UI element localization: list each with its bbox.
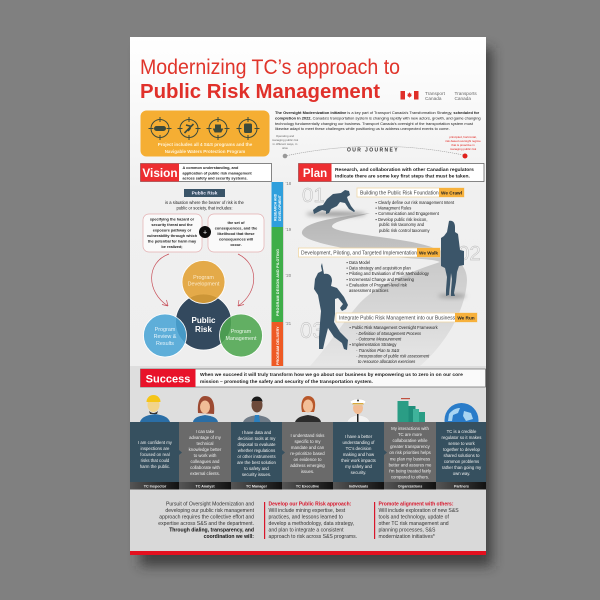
- footer left text: expertise across S&S and the department.: [158, 521, 254, 527]
- band behind avatars: [130, 366, 486, 422]
- icon: partners globe: [444, 403, 478, 422]
- Government of Canada logo: Transports: [454, 91, 477, 96]
- step 2 bullets: ▪ Piloting and Evaluation of Risk Methodology: [346, 271, 430, 276]
- step 2 bullets: ▪ Data strategy and acquisition plan: [346, 266, 411, 270]
- column: TC Executive: I understand risks: [291, 433, 324, 438]
- icon: train target: [236, 117, 260, 140]
- footer middle text: approach to risk across S&S programs.: [268, 534, 357, 540]
- column: Partners: rather than going my: [442, 465, 482, 470]
- column: TC Manager: whether regulations: [238, 448, 275, 453]
- column: Individuals: understanding of: [342, 440, 375, 445]
- step 1 bullets: ▪ Clearly define our risk management Intent: [376, 200, 455, 205]
- column: TC Inspector: risks that could: [141, 458, 170, 463]
- column: Individuals: I have a better: [345, 434, 373, 439]
- circle: program development: Development: [188, 282, 220, 288]
- avatar: inspector: [140, 395, 170, 422]
- column: TC Manager: are the best solution: [237, 460, 276, 465]
- column: Organizations: me plan my business: [390, 456, 430, 462]
- title: Public Risk Management: [140, 81, 380, 103]
- public risk label: Public: [191, 316, 216, 325]
- footer middle text: Develop our Public Risk approach:: [268, 502, 352, 508]
- audience columns: [130, 422, 486, 482]
- column: Organizations: greater transparency: [390, 444, 431, 449]
- footer left text: coordination we will:: [204, 534, 254, 540]
- public risk definition: public or society, that includes:: [176, 206, 233, 210]
- icon: car target: [148, 117, 172, 140]
- step 2 bullets: assessment practices: [349, 288, 388, 293]
- footer left text: Through dialing, transparency, and: [169, 528, 254, 534]
- column: Individuals: my safety and: [345, 464, 372, 469]
- column: TC Analyst: to work with: [194, 453, 217, 458]
- callout: consequences: occur.: [230, 243, 242, 247]
- column: Partners: regulator so it makes: [442, 435, 481, 440]
- icon: plane target: [178, 117, 200, 140]
- timeline: ’21: [286, 321, 292, 326]
- icon: plus: [199, 226, 211, 238]
- footer middle text: develop a methodology, data strategy,: [268, 521, 354, 527]
- our journey arc: managing public risk: [272, 138, 299, 142]
- audience labels: [130, 482, 486, 490]
- our journey arc: in different ways, in: [273, 142, 298, 146]
- step 3 bullets: [350, 325, 439, 364]
- column: TC Analyst: advantage of my: [189, 435, 222, 440]
- panel: success heading: [140, 369, 486, 387]
- intro paragraph: [275, 110, 481, 131]
- audience labels: TC Manager: [246, 484, 268, 488]
- panel: success heading: When we succeed it will truly transform how we go about our business by empowering us to zero in on our core: [200, 372, 463, 378]
- circle: program review: Program: [155, 327, 176, 333]
- footer right text: planning processes, S&S: [378, 528, 436, 534]
- step 3 bullets: - Outcome Measurement: [356, 336, 402, 342]
- callout: hazard: exposure pathway or: [153, 228, 192, 232]
- callout: hazard: be realized;: [161, 245, 183, 249]
- project scope caption: Navigable Waters Protection Program: [165, 149, 245, 154]
- circle: program management: Management: [226, 336, 257, 342]
- our journey arc: OUR JOURNEY: [347, 148, 399, 154]
- circle: program management: [220, 314, 262, 357]
- Government of Canada logo: Transport: [425, 91, 446, 96]
- footer left text: Pursuit of Oversight Modernization and: [166, 502, 254, 508]
- panel: vision heading: application of public risk management: [182, 171, 252, 175]
- circle: program review: Results: [156, 341, 174, 347]
- panel: project scope: [140, 110, 270, 156]
- title: Modernizing TC’s approach to: [140, 55, 400, 79]
- circle: program development: Program: [193, 275, 214, 281]
- audience labels: Organizations: [398, 484, 422, 488]
- footer left text: approach requires the collective effort and: [159, 514, 254, 520]
- title: [140, 55, 400, 103]
- footer right text: [374, 502, 459, 540]
- circle: program management: Program: [231, 329, 252, 335]
- our journey arc: silos: [282, 146, 288, 150]
- column: Partners: shared solutions to: [443, 453, 480, 458]
- column: Individuals: security.: [351, 470, 366, 475]
- column: TC Analyst: external clients.: [190, 471, 220, 476]
- step 2 heading: We Walk: [419, 250, 438, 255]
- callout: consequences: consequences will: [219, 238, 253, 242]
- step 3 bullets: ▪ Public Risk Management Oversight Framework: [350, 325, 439, 330]
- column: TC Executive: re-prioritize based: [290, 451, 325, 456]
- column: Organizations: better and assures me: [389, 462, 432, 468]
- column: TC Executive: issues.: [301, 469, 314, 474]
- our journey arc: that is proactive in: [451, 143, 475, 147]
- avatar: analyst: [193, 396, 218, 422]
- step 1 heading: Building the Public Risk Foundation: [360, 190, 439, 196]
- project scope caption: Project includes all 4 S&S programs and the: [158, 142, 253, 147]
- step 1 bullets: ▪ Managment Rules: [376, 206, 411, 210]
- panel: success heading: Success: [146, 374, 190, 386]
- footer middle text: Will include mining expertise, best: [268, 508, 346, 514]
- column: Organizations: [384, 422, 436, 482]
- footer middle text: practices, and lessons learned to: [268, 514, 343, 520]
- timeline: PROGRAM DESIGN AND PILOTING: [276, 249, 280, 316]
- icon: organizations buildings: [398, 398, 425, 422]
- step 3 bullets: - Incorporation of public risk assessment: [356, 354, 430, 358]
- panel: plan heading: Plan: [303, 168, 327, 180]
- avatar: individuals officer: [347, 399, 370, 422]
- step 3 heading: We Run: [457, 315, 475, 320]
- column: Partners: common problems: [444, 459, 479, 464]
- column: TC Executive: specific to my: [294, 439, 321, 444]
- timeline: ’18: [286, 181, 292, 186]
- footer left text: [158, 502, 255, 540]
- callout: hazard: the potential for harm may: [148, 240, 197, 244]
- intro paragraph: technology fundamentally changing our business. Transport Canada's oversight of the transportation system must: [275, 121, 474, 126]
- circle: public risk: [176, 294, 232, 350]
- panel: vision heading: A common understanding, and: [182, 166, 239, 170]
- footer right text: modernization initiatives*: [378, 534, 435, 540]
- column: TC Inspector: [130, 422, 179, 482]
- column: TC Analyst: I can take: [196, 429, 215, 434]
- step 2 bullets: ▪ Incremental Change and Partnering: [346, 277, 415, 282]
- timeline: PROGRAM DELIVERY: [276, 326, 280, 365]
- column: Partners: [436, 422, 486, 482]
- timeline: ’19: [286, 227, 292, 232]
- panel: vision heading: Vision: [142, 166, 178, 180]
- column: Partners: own way.: [453, 471, 470, 476]
- infographic poster: [130, 37, 498, 572]
- audience labels: TC Inspector: [144, 484, 167, 488]
- sheet: [130, 37, 486, 555]
- audience labels: TC Executive: [296, 484, 319, 488]
- step 3 bullets: - Transition Plan to S&S: [356, 348, 400, 353]
- column: TC Manager: decision tools at my: [238, 436, 276, 441]
- column: TC Analyst: technical: [197, 441, 214, 446]
- footer middle text: and plan to integrate a consistent: [268, 528, 344, 534]
- column: TC Inspector: inspections are: [141, 446, 170, 451]
- circle: program review: Review &: [154, 334, 177, 340]
- step 2 heading: [298, 248, 440, 257]
- Government of Canada logo: [400, 91, 477, 101]
- icon: plus: +: [203, 230, 207, 236]
- column: TC Executive: [282, 422, 333, 482]
- column: Partners: TC is a credible: [447, 429, 477, 434]
- audience labels: Partners: [454, 484, 469, 488]
- walking woman figure: [438, 221, 466, 298]
- step 2 heading: Development, Piloting, and Targeted Implementation: [301, 250, 417, 256]
- column: Organizations: My interactions with: [391, 426, 429, 431]
- panel: plan heading: Research, and collaboration with other Canadian regulators: [335, 167, 474, 173]
- column: TC Executive: mandate and can: [291, 445, 325, 450]
- step 1 bullets: ▪ Communication and Engagement: [376, 211, 440, 216]
- Government of Canada logo: Canada: [425, 96, 442, 101]
- our journey arc: risk-based oversight regime: [445, 139, 481, 143]
- audience labels: Individuals: [349, 484, 368, 488]
- step 3 heading: Integrate Public Risk Management into our Business: [339, 315, 456, 321]
- road: [302, 213, 467, 366]
- arrow: left curve: [152, 254, 169, 306]
- crawler figure: [306, 190, 366, 216]
- callout: hazard: security threat and the: [151, 223, 193, 227]
- step 3 number: 03: [300, 318, 324, 343]
- column: Partners: together to develop: [443, 447, 481, 452]
- step 1 bullets: [376, 200, 455, 233]
- step 2 bullets: ▪ Data Model: [346, 260, 370, 265]
- icon: ship target: [206, 117, 230, 140]
- our journey arc: Operating and: [276, 134, 295, 138]
- intro paragraph: The Oversight Modernization initiative is a key part of Transport Canada's Transformation Strategy, scheduled for: [275, 110, 480, 115]
- column: TC Manager: to safety and: [244, 466, 269, 471]
- column: TC Executive: on evidence to: [294, 457, 322, 462]
- column: TC Analyst: [179, 422, 231, 482]
- step 1 heading: [357, 188, 464, 197]
- circle: program development: [182, 260, 225, 304]
- our journey arc: principled, horizontal,: [449, 135, 477, 139]
- footer middle text: [264, 502, 357, 540]
- footer right text: Will include exploration of new S&S: [378, 508, 459, 514]
- column: Individuals: TC's decision: [346, 446, 372, 451]
- column: TC Inspector: focused on real: [140, 452, 170, 457]
- column: TC Manager: [231, 422, 282, 482]
- panel: vision heading: across safety and security systems.: [182, 176, 248, 180]
- column: Organizations: collaborative while: [392, 438, 428, 443]
- panel: vision heading: [140, 164, 272, 182]
- sheet shadow: [140, 48, 492, 566]
- step 2 number: 02: [458, 242, 481, 265]
- step 3 heading: [336, 313, 477, 322]
- column: TC Analyst: collaborate with: [190, 465, 221, 470]
- panel: plan heading: indicate there are some key first steps that must be taken.: [335, 174, 470, 180]
- footer left text: developing our public risk management: [165, 508, 255, 514]
- footer right text: tools and technology, update of: [378, 514, 450, 520]
- column: TC Analyst: colleagues and: [191, 459, 220, 464]
- callout: hazard: vulnerability through which: [147, 234, 198, 238]
- runner figure: [314, 263, 348, 350]
- circle: program review: [144, 314, 186, 357]
- column: Individuals: making and how: [343, 452, 375, 457]
- public risk definition: is a situation where the bearer of risk is the: [165, 200, 245, 205]
- callout: hazard: [143, 214, 202, 252]
- panel: plan heading: [298, 164, 484, 182]
- column: Organizations: compared to others.: [391, 474, 429, 480]
- column: TC Manager: security issues.: [242, 472, 271, 477]
- step 3 bullets: - Definition of Management Process: [356, 331, 421, 336]
- public risk label: Risk: [195, 325, 212, 334]
- avatar: manager: [243, 396, 271, 422]
- intro paragraph: likewise adapt to meet these challenges while positioning us to address unexpected events to come.: [275, 126, 450, 131]
- step 2 bullets: ▪ Evaluation of Program-level risk: [346, 282, 408, 288]
- callout: consequences: consequences, and the: [215, 226, 257, 230]
- footer right text: Promote alignment with others:: [378, 502, 454, 508]
- step 3 bullets: to resource allocation exercises: [358, 359, 415, 364]
- column: TC Manager: I have data and: [242, 430, 272, 435]
- footer panel: [130, 490, 486, 552]
- column: TC Inspector: harm the public.: [140, 464, 170, 469]
- footer right text: other TC risk management and: [378, 521, 449, 527]
- column: Individuals: their work impacts: [341, 458, 376, 463]
- callout: consequences: [208, 214, 264, 252]
- public risk definition: Public Risk: [192, 191, 218, 197]
- column: TC Manager: disposal to evaluate: [238, 442, 276, 447]
- column: TC Executive: address emerging: [290, 463, 325, 468]
- audience labels: TC Analyst: [195, 484, 215, 488]
- column: TC Analyst: knowledge better: [189, 447, 222, 452]
- Government of Canada logo: Canada: [454, 96, 471, 101]
- panel: success heading: mission – promoting the safety and security of the transportation system.: [200, 379, 373, 385]
- our journey arc: [272, 134, 481, 158]
- step 2 bullets: [346, 260, 430, 293]
- avatar: executive: [295, 396, 321, 422]
- timeline: ’20: [286, 273, 292, 278]
- step 1 bullets: ▪ Develop public risk lexicon,: [376, 217, 427, 222]
- callout: consequences: the set of: [227, 221, 245, 225]
- arrow: right curve: [238, 254, 254, 306]
- step 3 bullets: ▪ Implementation Strategy: [350, 342, 397, 347]
- step 1 number: 01: [302, 184, 325, 207]
- callout: hazard: specifying the hazard or: [150, 218, 195, 222]
- our journey arc: managing public risk: [450, 147, 477, 151]
- column: TC Inspector: I am confident my: [138, 440, 173, 445]
- timeline: DEVELOPMENT: [278, 194, 282, 221]
- column: Organizations: TC are more: [398, 432, 423, 437]
- program circle diagram: [144, 260, 262, 357]
- callout: consequences: likelihood that these: [217, 232, 255, 236]
- public risk definition: [165, 189, 245, 210]
- step 1 heading: We Crawl: [441, 190, 462, 195]
- column: Partners: sense to work: [448, 441, 476, 446]
- column: Organizations: on risk priorities helps: [389, 450, 431, 455]
- column: Individuals: [333, 422, 384, 482]
- column: Organizations: I'm being treated fairly: [389, 468, 432, 474]
- step 1 bullets: public risk control taxonomy: [379, 228, 430, 233]
- footer red bar: [130, 551, 486, 555]
- project scope caption: [158, 142, 253, 154]
- step 1 bullets: public risk taxonomy and: [379, 222, 425, 227]
- timeline: [272, 181, 292, 366]
- public risk label: [191, 316, 216, 334]
- column: TC Manager: or other instruments: [237, 454, 276, 459]
- intro paragraph: completion in 2022. Canada's transportation system is changing rapidly with new actors, growth, and game changing: [275, 116, 481, 120]
- timeline: RESEARCH AND: [274, 193, 278, 221]
